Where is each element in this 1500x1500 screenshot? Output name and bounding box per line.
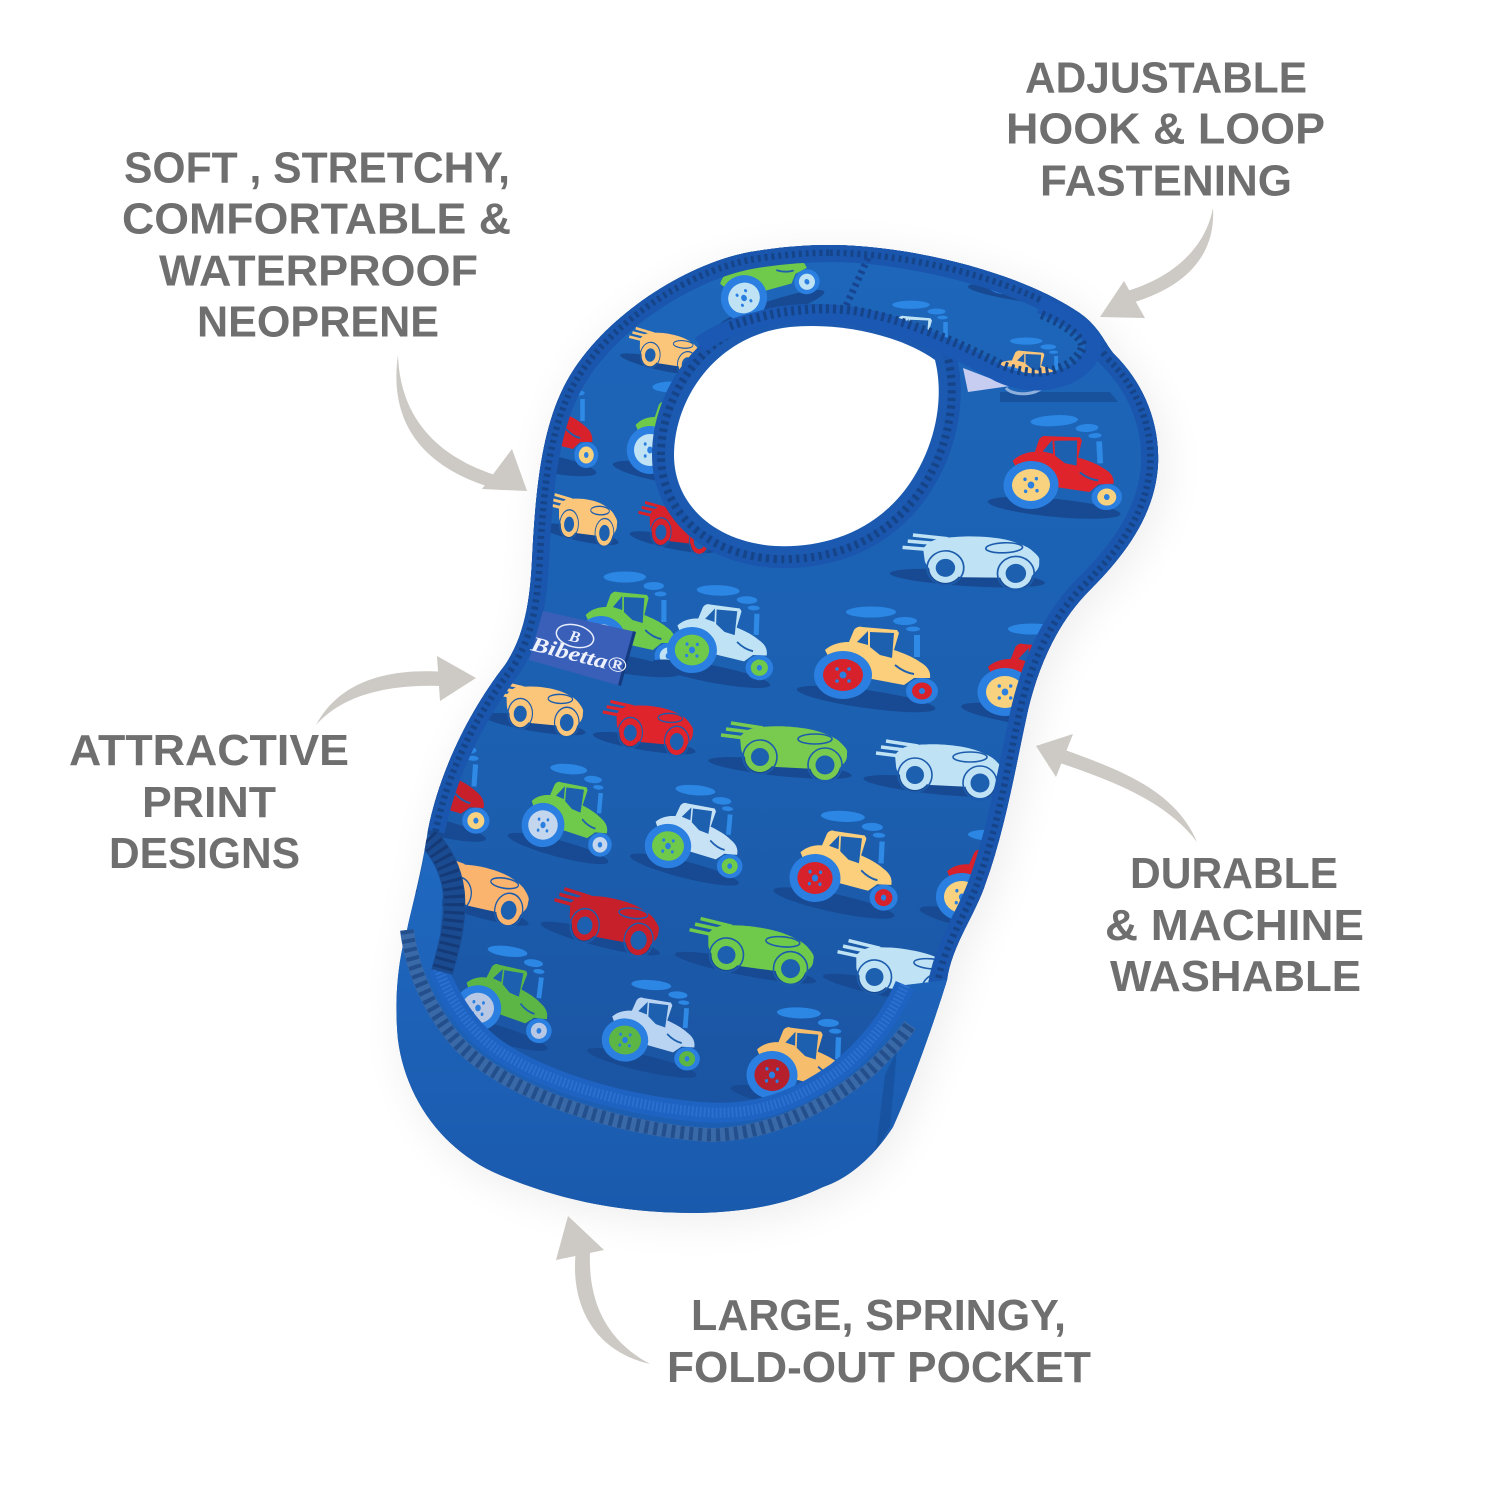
pocket side seam: [428, 838, 454, 972]
heading: large springy fold-out pocket: LARGE, SPRINGY,: [691, 1291, 1066, 1340]
bib illustration: [367, 185, 1158, 1213]
row 4 vehicles: [460, 946, 842, 1100]
neck opening: [674, 326, 939, 546]
arrow: to fastening: [1100, 208, 1213, 318]
heading: adjustable hook and loop fastening: HOOK & LOOP: [1006, 104, 1325, 154]
heading: large springy fold-out pocket: FOLD-OUT POCKET: [667, 1343, 1091, 1392]
heading: adjustable hook and loop fastening: [1006, 54, 1325, 206]
heading: durable and machine washable: [1105, 849, 1364, 1001]
Bibetta brand label: Bibetta®: [528, 631, 630, 679]
heading: attractive print designs: ATTRACTIVE: [69, 726, 349, 775]
heading: attractive print designs: PRINT: [142, 778, 276, 827]
Bibetta brand label: [528, 611, 636, 686]
strap with hook and loop tab: [700, 305, 1094, 382]
heading: attractive print designs: DESIGNS: [109, 829, 300, 878]
row 1 vehicles: [491, 205, 1123, 596]
bib drop shadow: [402, 253, 1164, 1221]
heading: soft stretchy neoprene: WATERPROOF: [159, 246, 478, 296]
arrow: to durable seam: [1036, 734, 1197, 842]
stitch seam on strap: [846, 258, 868, 306]
heading: soft stretchy neoprene: SOFT , STRETCHY,: [124, 144, 510, 192]
heading: durable and machine washable: & MACHINE: [1105, 901, 1364, 950]
heading: durable and machine washable: WASHABLE: [1110, 952, 1361, 1001]
heading: adjustable hook and loop fastening: FASTENING: [1040, 156, 1292, 206]
strap vehicles: [892, 250, 1067, 374]
heading: soft stretchy neoprene: NEOPRENE: [197, 298, 439, 346]
bib body: [396, 245, 1158, 1213]
fold-out pocket: [396, 850, 947, 1213]
outer stitched trim: [428, 245, 1158, 985]
row 2 vehicles: [482, 572, 1095, 801]
arrow: to neoprene edge: [396, 355, 527, 491]
tractor print pattern: [367, 185, 1123, 1121]
row 3 vehicles: [416, 740, 1002, 1008]
velcro fastener under strap: [963, 368, 1118, 402]
Bibetta brand label: B: [566, 628, 582, 647]
arrow: to pocket: [556, 1216, 650, 1364]
heading: large springy fold-out pocket: [667, 1291, 1091, 1392]
heading: durable and machine washable: DURABLE: [1130, 849, 1338, 898]
heading: attractive print designs: [69, 726, 349, 878]
heading: soft stretchy neoprene: COMFORTABLE &: [122, 194, 511, 244]
heading: soft stretchy neoprene: [122, 144, 511, 346]
heading: adjustable hook and loop fastening: ADJUSTABLE: [1025, 54, 1307, 102]
arrow: to print design: [316, 656, 476, 725]
